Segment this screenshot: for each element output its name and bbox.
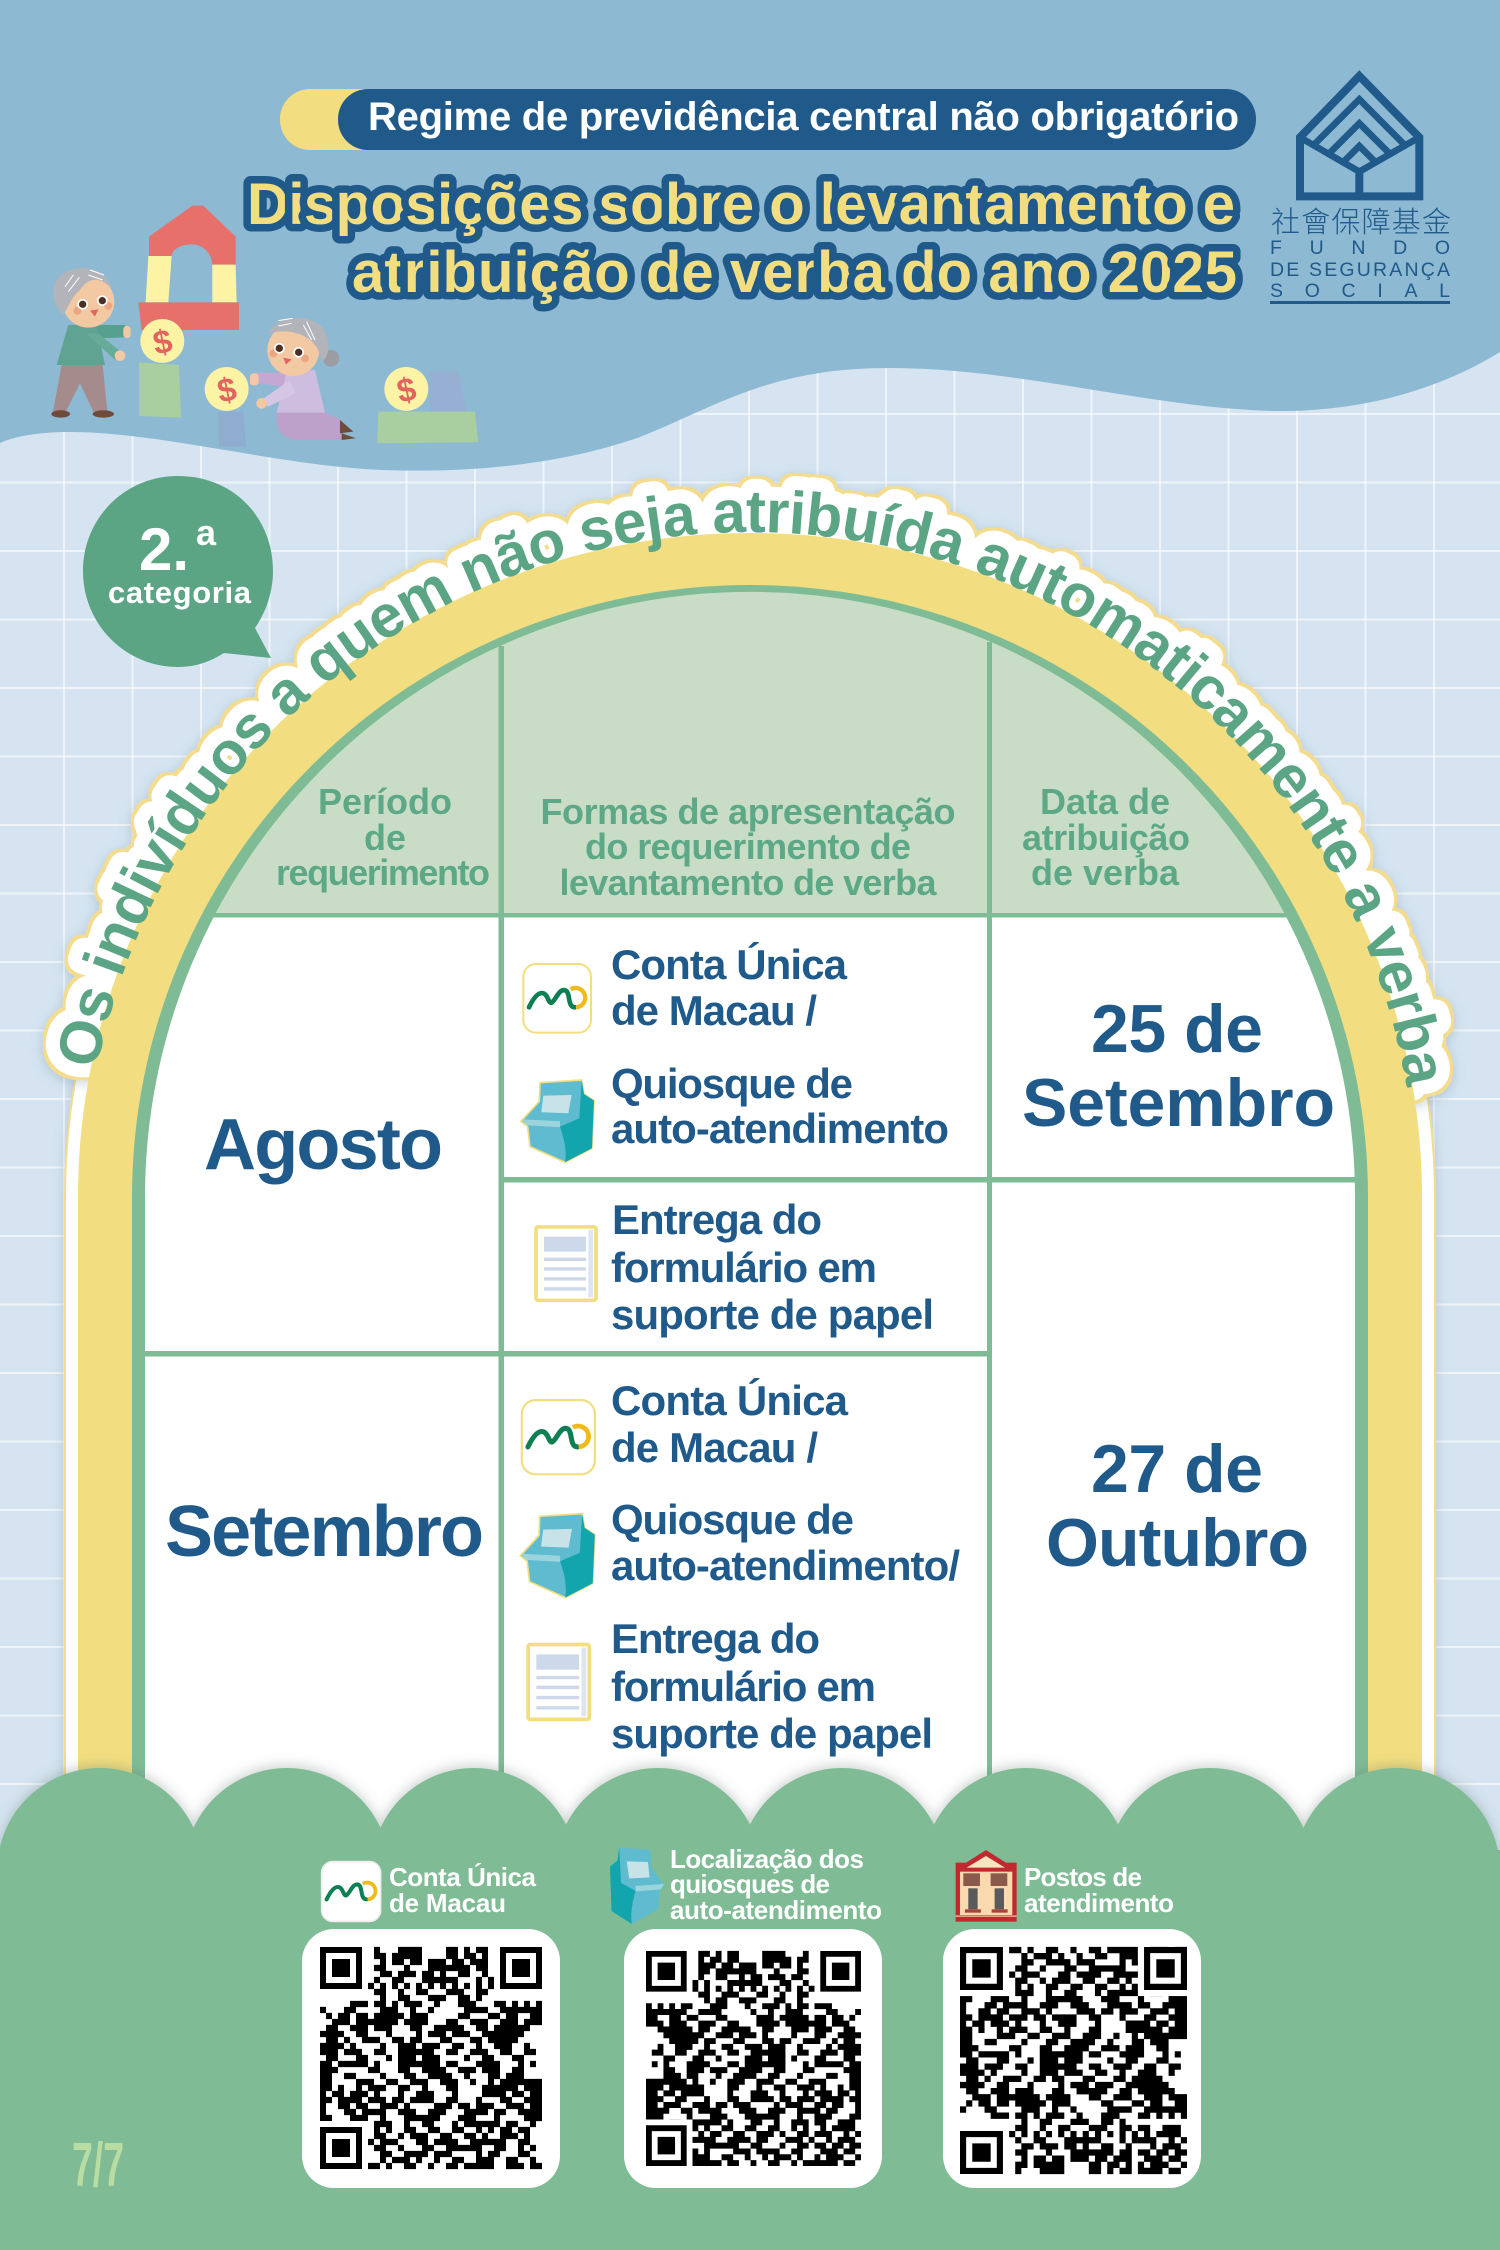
top blue wave header [0, 0, 1500, 471]
logo: Fundo de Segurança Social: 社會保障基金 [1271, 199, 1451, 241]
footer label: Conta Única de Macau: Conta Única [389, 1862, 537, 1892]
table grid lines [145, 642, 1357, 1836]
footer label: Conta Única de Macau [322, 1862, 537, 1921]
method text: Conta Única de Macau: Conta Única [611, 940, 848, 988]
date: 27 de Outubro [1046, 1431, 1309, 1581]
table header text: formas [540, 791, 956, 903]
method text: Conta Única de Macau [611, 940, 848, 1034]
method text: Entrega: formulário em [611, 1244, 877, 1291]
method text: Quiosque: Quiosque de [611, 1060, 853, 1107]
method text: Quiosque: auto-atendimento [611, 1105, 949, 1152]
method text: Entrega [611, 1196, 934, 1338]
illustration: elderly couple with blocks and coins: $ [214, 371, 240, 411]
footer label: Postos de atendimento: atendimento [1024, 1888, 1174, 1918]
category speech bubble [83, 476, 273, 667]
curved heading halo [44, 478, 1460, 1091]
curved heading text: Os indivíduos a quem não seja atribuída automaticamente a verba [38, 472, 1459, 1112]
method text: Conta Única de Macau: de Macau / [611, 987, 817, 1034]
icon: Conta Única app [523, 964, 591, 1033]
green scalloped footer [0, 1768, 1500, 2250]
category speech bubble: a [196, 512, 217, 553]
logo: Fundo de Segurança Social: FUNDO [1270, 237, 1450, 259]
icon: Conta Única app 2 [522, 1400, 595, 1474]
method text: Entrega 2 [611, 1615, 933, 1757]
QR code: quiosques [624, 1929, 882, 2188]
month: Setembro: Setembro [165, 1492, 484, 1572]
footer label: Postos de atendimento [956, 1850, 1174, 1922]
page number: 7/7 [72, 2131, 124, 2200]
method text: Quiosque 2: auto-atendimento/ [611, 1542, 960, 1589]
method text: Conta Única de Macau 2 [611, 1376, 849, 1471]
QR code: postos de atendimento [943, 1929, 1201, 2188]
illustration: elderly couple with blocks and coins [51, 206, 478, 447]
table header text: formas: Formas de apresentação [540, 791, 956, 832]
method text: Quiosque 2: Quiosque de [611, 1496, 854, 1543]
logo: Fundo de Segurança Social [1270, 76, 1451, 304]
table header text: período: de [364, 817, 406, 858]
footer label: Conta Única de Macau: de Macau [389, 1888, 506, 1918]
category speech bubble: 2. [139, 516, 189, 583]
method text: Entrega 2: suporte de papel [611, 1710, 933, 1757]
title: Disposições sobre o levantamento e [247, 172, 1235, 237]
table header text: período: requerimento [276, 852, 490, 893]
icon: kiosk 2 [520, 1514, 595, 1598]
date: 25 de Setembro: 25 de [1091, 991, 1263, 1067]
method text: Conta Única de Macau 2: Conta Única [611, 1376, 849, 1424]
date: 25 de Setembro: Setembro [1022, 1065, 1335, 1141]
method text: Quiosque 2 [611, 1496, 960, 1589]
footer label: Postos de atendimento: Postos de [1024, 1862, 1142, 1892]
date: 27 de Outubro: Outubro [1046, 1505, 1309, 1581]
method text: Entrega 2: formulário em [611, 1663, 876, 1710]
table header text: formas: levantamento de verba [560, 862, 937, 903]
logo: Fundo de Segurança Social: SOCIAL [1270, 280, 1450, 302]
footer label: Localização dos quiosques: Localização dos [670, 1844, 864, 1874]
illustration: elderly couple with blocks and coins: $ [150, 323, 176, 363]
QR code: Conta Única de Macau [302, 1929, 560, 2188]
illustration: elderly couple with blocks and coins: $ [394, 371, 420, 411]
table header text: data: de verba [1031, 852, 1180, 893]
arch outer white band [65, 1060, 1435, 1830]
method text: Entrega: Entrega do [612, 1196, 822, 1243]
title [247, 172, 1237, 305]
icon: kiosk [521, 1080, 594, 1162]
logo: Fundo de Segurança Social: DE SEGURANÇA [1270, 259, 1450, 281]
method text: Conta Única de Macau 2: de Macau / [611, 1424, 818, 1471]
footer label: Localização dos quiosques [610, 1844, 882, 1925]
method text: Entrega: suporte de papel [611, 1291, 934, 1338]
regime pill [280, 89, 1256, 150]
table header text: data: Data de [1040, 781, 1170, 822]
month: Agosto: Agosto [204, 1105, 443, 1185]
table header text: data: atribuição [1022, 817, 1190, 858]
table header text: período [276, 781, 490, 893]
date: 25 de Setembro [1022, 991, 1335, 1141]
table header text: formas: do requerimento de [585, 826, 911, 867]
date: 27 de Outubro: 27 de [1091, 1431, 1263, 1507]
icon: paper form 2 [528, 1645, 589, 1719]
table header text: período: Período [318, 781, 452, 822]
method text: Entrega 2: Entrega do [611, 1615, 820, 1662]
icon: paper form [536, 1227, 596, 1300]
category speech bubble: categoria [108, 575, 252, 610]
footer label: Localização dos quiosques: auto-atendimento [670, 1895, 882, 1925]
method text: Quiosque [611, 1060, 949, 1152]
table header band [215, 592, 1285, 915]
regime pill: Regime de previdência central não obrigatório [368, 95, 1239, 139]
table header text: data [1022, 781, 1190, 893]
arch frame [78, 533, 1422, 1830]
title: atribuição de verba do ano 2025 [352, 240, 1237, 305]
footer label: Localização dos quiosques: quiosques de [670, 1869, 830, 1899]
